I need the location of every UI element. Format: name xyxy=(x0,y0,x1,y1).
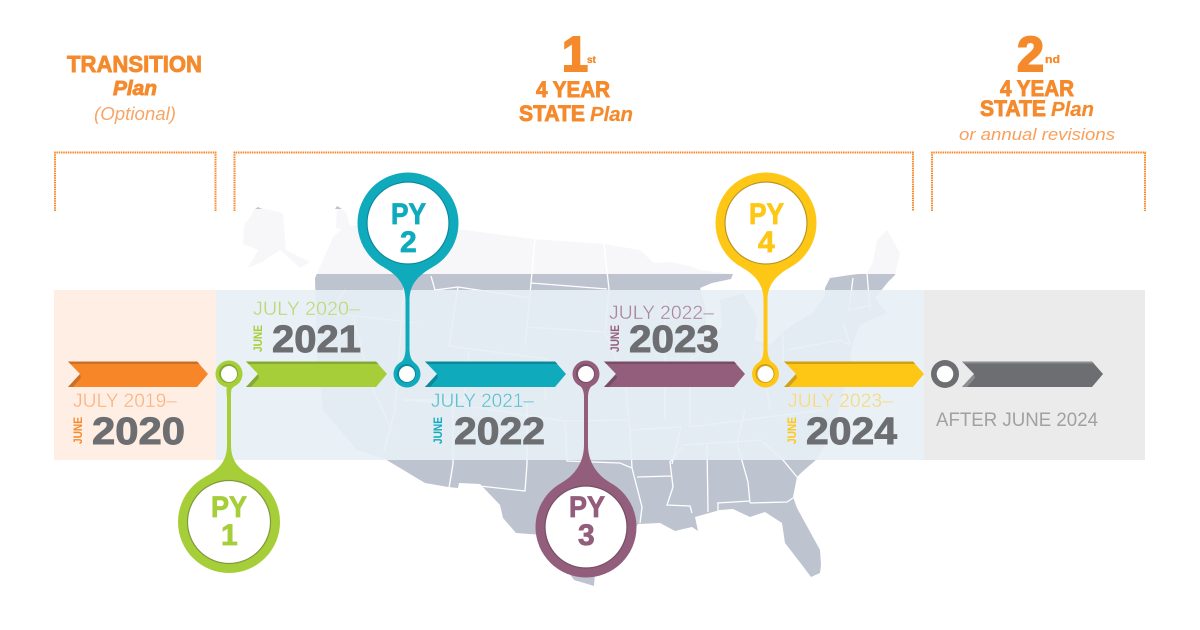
pin: PY 2 xyxy=(358,172,458,388)
date label: July 2021 to June 2022 xyxy=(431,390,545,453)
pin: PY 4: 4 xyxy=(758,226,775,259)
heading: second 4 year state plan: nd xyxy=(1045,54,1060,66)
pin: PY 3 xyxy=(536,360,636,578)
heading: second 4 year state plan: or annual revisions xyxy=(959,125,1116,144)
node: after June 2024 xyxy=(931,360,959,388)
date label: July 2020 to June 2021: 2021 xyxy=(272,319,361,361)
heading: second 4 year state plan: STATE xyxy=(980,96,1046,121)
date label: July 2020 to June 2021: JULY 2020– xyxy=(253,298,360,320)
date label: July 2023 to June 2024: JUNE xyxy=(785,417,799,444)
date label: July 2022 to June 2023 xyxy=(608,302,719,361)
pin: PY 2: PY xyxy=(391,198,426,231)
heading: transition plan: TRANSITION xyxy=(67,51,202,77)
bracket: first state plan xyxy=(234,152,913,211)
pin: PY 1: 1 xyxy=(221,519,238,552)
date label: July 2023 to June 2024: 2024 xyxy=(806,411,897,453)
heading: second 4 year state plan: 2 xyxy=(1017,28,1044,82)
date label: July 2019 to June 2020 xyxy=(71,390,185,453)
pin: PY 1: PY xyxy=(211,491,247,524)
heading: first 4 year state plan: 4 YEAR xyxy=(536,77,610,102)
pin: PY 1 xyxy=(178,360,280,573)
fade over northern part of map xyxy=(230,190,910,274)
arrow: purple xyxy=(604,362,745,387)
date label: July 2023 to June 2024: JULY 2023– xyxy=(788,390,893,412)
pin: PY 3: 3 xyxy=(578,519,595,552)
date label: July 2022 to June 2023: 2023 xyxy=(629,319,719,361)
pin: PY 3: PY xyxy=(569,491,605,524)
arrow: teal xyxy=(425,362,566,387)
bracket: second state plan xyxy=(932,152,1145,211)
date label: July 2019 to June 2020: JULY 2019– xyxy=(73,390,177,412)
heading: second 4 year state plan: 4 YEAR xyxy=(1000,76,1074,101)
date label: after June 2024: AFTER JUNE 2024 xyxy=(936,410,1098,431)
heading: first 4 year state plan xyxy=(519,28,633,126)
arrow: green xyxy=(246,362,387,387)
heading: first 4 year state plan: STATE xyxy=(519,101,585,126)
date label: July 2022 to June 2023: JUNE xyxy=(608,325,622,352)
pin: PY 2: 2 xyxy=(400,226,417,259)
heading: transition plan: (Optional) xyxy=(94,103,176,124)
date label: July 2020 to June 2021 xyxy=(251,298,361,361)
map: Alaska panhandle xyxy=(336,206,352,232)
band: second state plan period xyxy=(924,290,1145,460)
date label: July 2019 to June 2020: JUNE xyxy=(71,417,85,444)
map: Alaska xyxy=(243,208,310,268)
bracket: transition plan xyxy=(55,152,216,211)
band: first state plan period xyxy=(216,290,924,460)
date label: July 2019 to June 2020: 2020 xyxy=(92,411,185,453)
date label: July 2023 to June 2024 xyxy=(785,390,897,453)
date label: July 2022 to June 2023: JULY 2022– xyxy=(609,302,714,324)
date label: July 2020 to June 2021: JUNE xyxy=(251,325,265,352)
band: transition period xyxy=(54,290,216,460)
heading: transition plan xyxy=(67,51,202,124)
heading: first 4 year state plan: Plan xyxy=(590,104,633,126)
date label: July 2021 to June 2022: JUNE xyxy=(431,417,445,444)
arrow: yellow xyxy=(784,362,924,387)
map: United States silhouette xyxy=(243,206,900,586)
heading: first 4 year state plan: st xyxy=(587,55,597,66)
arrow: gray xyxy=(962,362,1103,387)
heading: second 4 year state plan xyxy=(959,28,1116,144)
date label: July 2021 to June 2022: JULY 2021– xyxy=(431,390,534,412)
map: Alaska ridge tips xyxy=(255,206,342,209)
pin: PY 4 xyxy=(716,172,816,388)
heading: transition plan: Plan xyxy=(113,78,157,100)
heading: second 4 year state plan: Plan xyxy=(1051,99,1094,121)
heading: first 4 year state plan: 1 xyxy=(562,28,588,82)
map: state borders xyxy=(330,239,872,523)
pin: PY 4: PY xyxy=(749,198,784,231)
date label: July 2021 to June 2022: 2022 xyxy=(454,411,545,453)
arrow: orange xyxy=(68,362,208,387)
